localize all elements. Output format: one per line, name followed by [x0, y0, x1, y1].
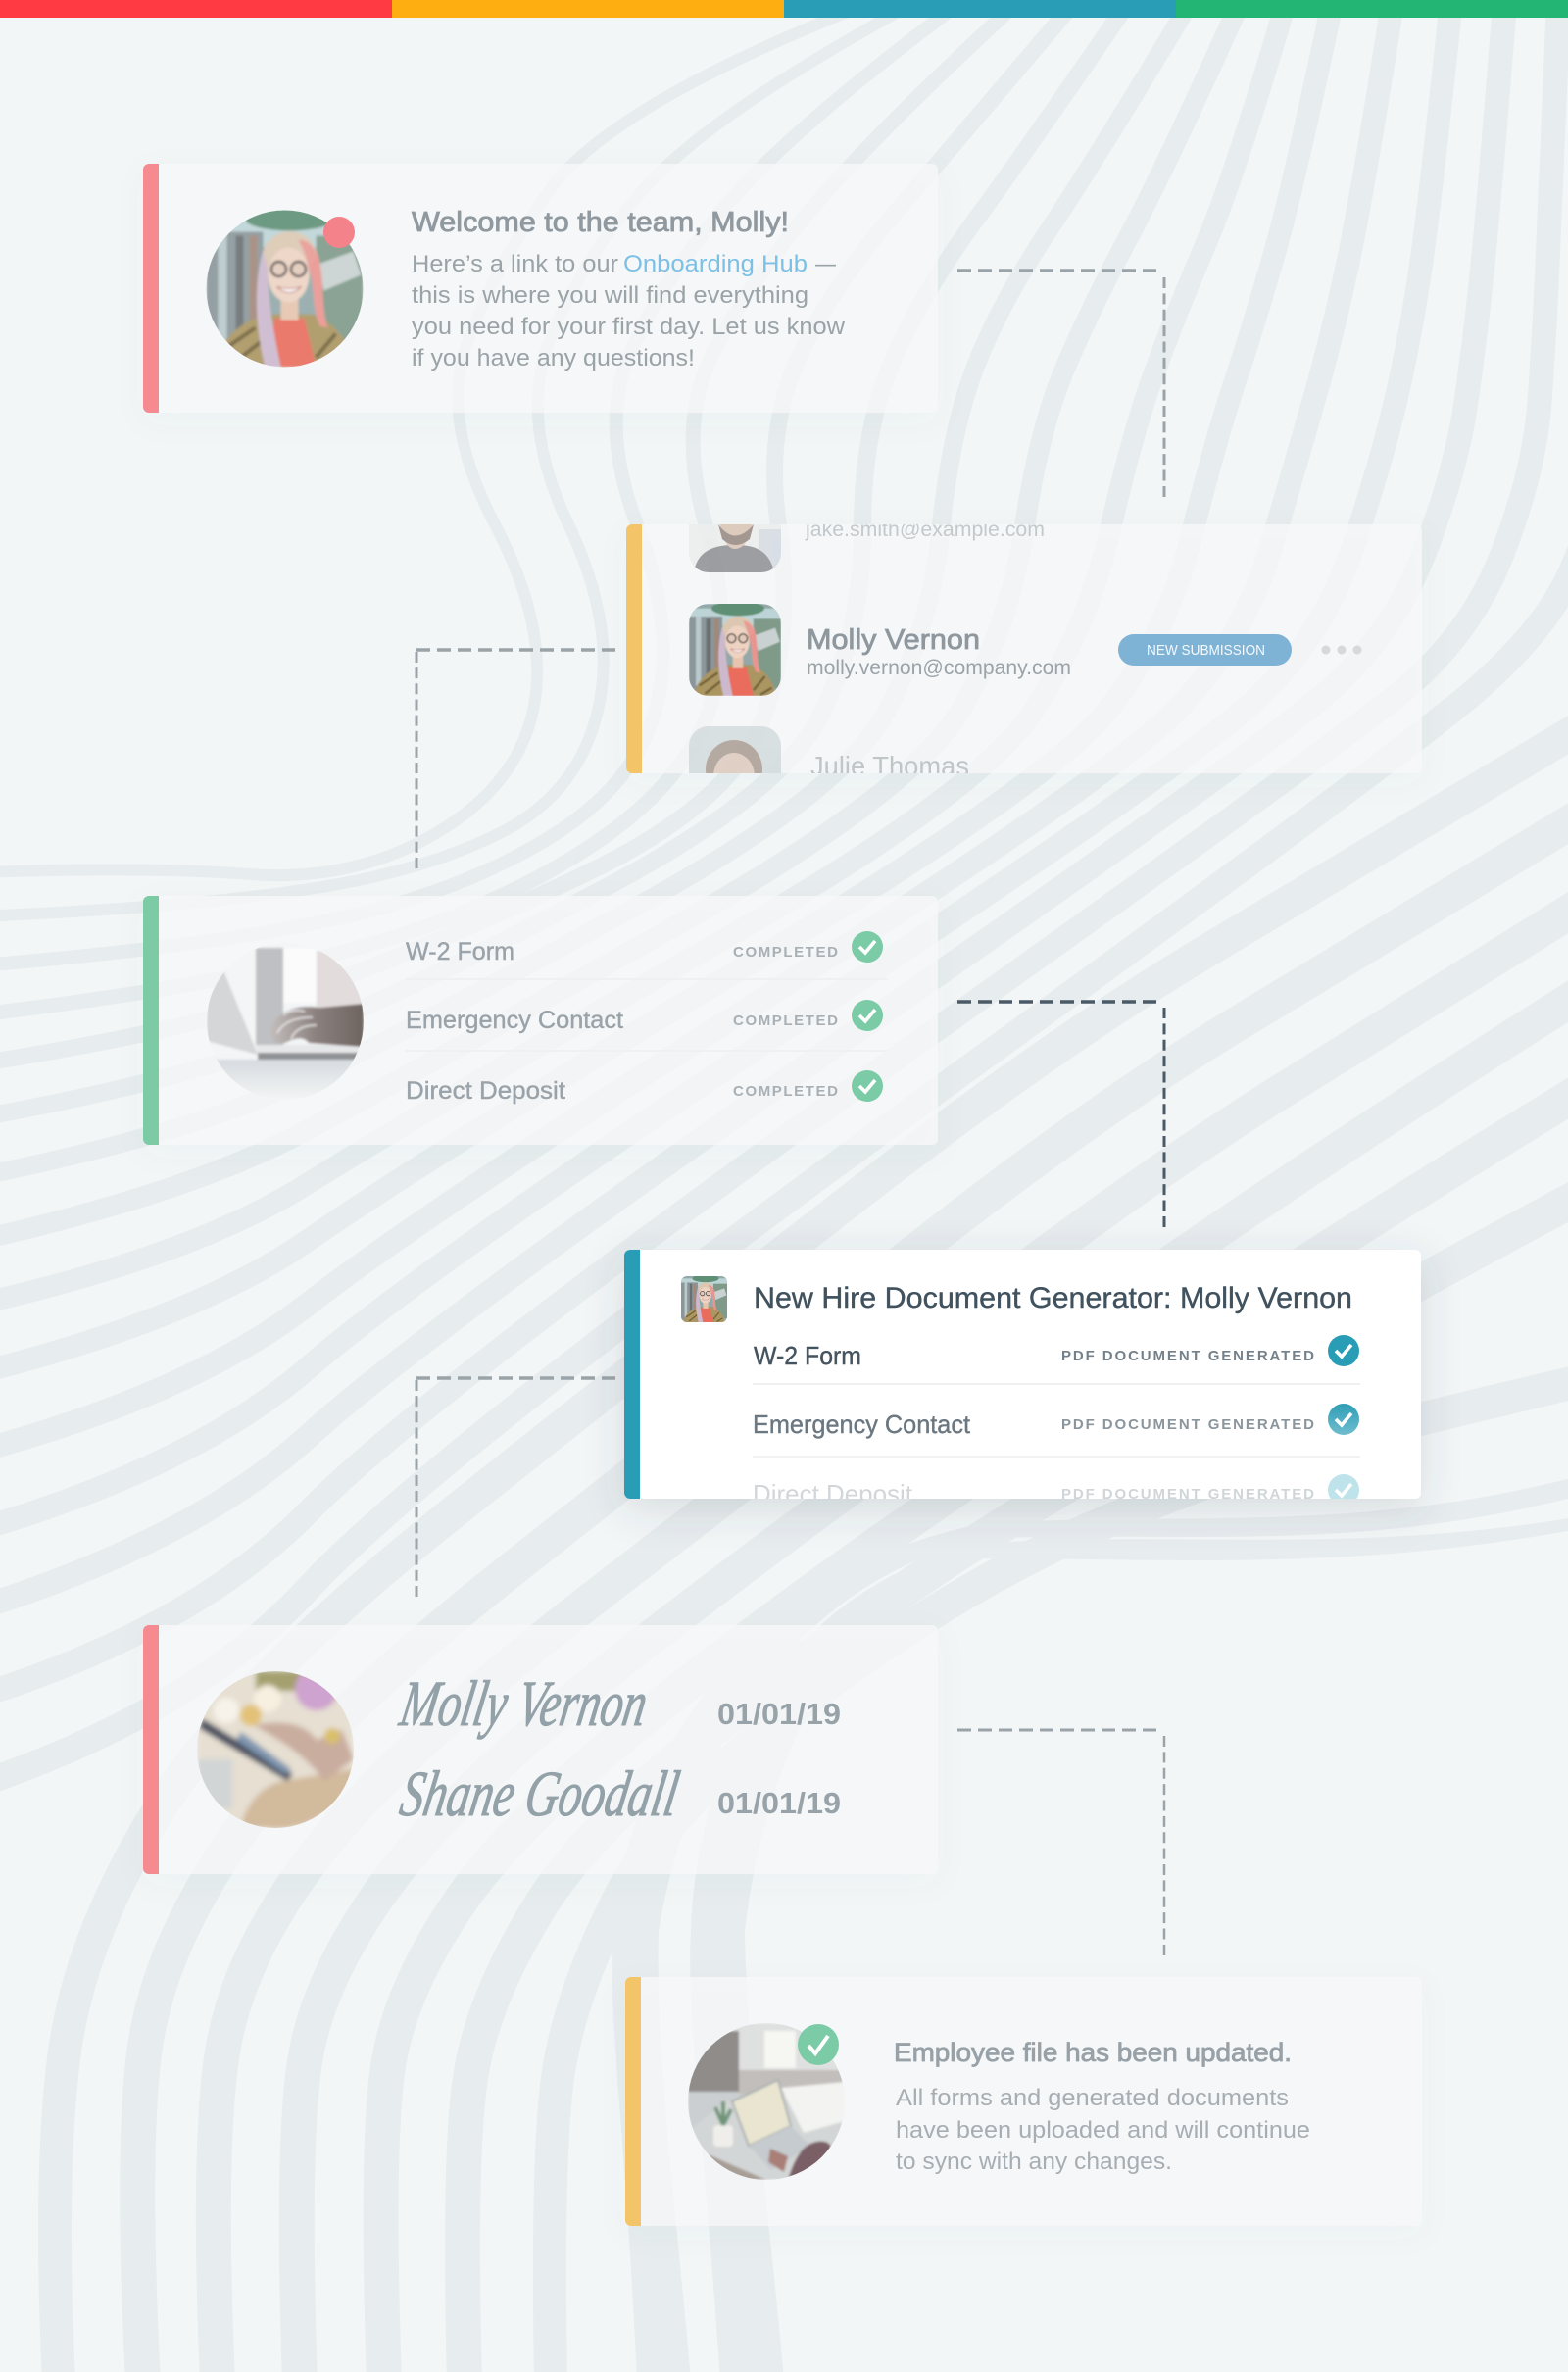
text: Direct Deposit row: [406, 1070, 883, 1105]
text: Molly signature: Molly Vernon: [395, 1668, 653, 1740]
text: W-2 Form row: W-2 Form: [406, 938, 514, 965]
heading: employee file: Employee file has been updated.: [894, 2038, 1292, 2067]
icon: laptop photo: [207, 943, 364, 1100]
arrow: connector forms to generator: [957, 1002, 1164, 1227]
text: Shane signature: Shane Goodall: [395, 1758, 684, 1830]
text: Direct Deposit row: [755, 1474, 1359, 1499]
text: Direct Deposit row: Direct Deposit: [753, 1479, 913, 1508]
panel: completed forms: [143, 896, 938, 1145]
text block: welcome body: [412, 251, 846, 371]
text: Emergency Contact row: COMPLETED: [733, 1013, 838, 1029]
text: W-2 row: W-2 Form: [754, 1341, 861, 1370]
heading: welcome: Welcome to the team, Molly!: [412, 207, 789, 238]
badge: new submission: [1118, 634, 1292, 666]
icon: Molly portrait: [206, 206, 363, 367]
icon: Julie portrait: [689, 726, 781, 773]
icon: more dots: [1321, 645, 1362, 655]
top colour bar: [0, 0, 1568, 18]
text: Direct Deposit row: Direct Deposit: [406, 1077, 565, 1105]
text: Molly date: 01/01/19: [717, 1697, 841, 1731]
text: Emergency Contact row: Emergency Contact: [753, 1409, 971, 1439]
text block: welcome body: Here’s a link to our: [412, 251, 618, 277]
arrow: connector submissions to forms: [415, 650, 615, 868]
text: Molly email: molly.vernon@company.com: [807, 657, 1071, 679]
badge: new submission: NEW SUBMISSION: [1147, 642, 1265, 659]
text: Julie name: Julie Thomas: [810, 751, 969, 781]
arrow: connector welcome to submissions: [957, 271, 1164, 497]
icon: Molly portrait small: [689, 601, 781, 696]
text block: welcome body: this is where you will find everything: [412, 282, 808, 309]
text block: welcome body: if you have any questions!: [412, 345, 695, 371]
text: Emergency Contact row: [406, 1000, 883, 1034]
panel: new submissions list: [626, 524, 1422, 773]
text: W-2 row: [753, 1335, 1359, 1366]
text: W-2 Form row: COMPLETED: [733, 944, 838, 961]
icon: phone photo: [197, 1667, 354, 1829]
text block: employee file body: All forms and generated documents: [896, 2085, 1289, 2111]
panel: signatures: [143, 1625, 938, 1874]
text: W-2 row: PDF DOCUMENT GENERATED: [1061, 1348, 1314, 1364]
text block: employee file body: [896, 2085, 1310, 2175]
panel: employee file updated: [625, 1977, 1309, 2226]
text: Emergency Contact row: PDF DOCUMENT GENERATED: [1061, 1416, 1314, 1433]
panel: new hire document generator: [624, 1250, 1421, 1508]
text: Emergency Contact row: [753, 1404, 1359, 1439]
text: Emergency Contact row: Emergency Contact: [406, 1007, 623, 1034]
arrow: connector signatures to employee file: [957, 1730, 1164, 1955]
text block: employee file body: to sync with any changes.: [896, 2149, 1172, 2175]
heading: generator title: New Hire Document Generator: Molly Vernon: [754, 1282, 1352, 1314]
text: Direct Deposit row: PDF DOCUMENT GENERATED: [1061, 1486, 1314, 1503]
icon: Jake portrait: [689, 524, 781, 572]
panel: welcome message: [143, 164, 938, 413]
text block: welcome body: —: [815, 251, 836, 277]
text: Molly name: Molly Vernon: [807, 624, 980, 656]
arrow: connector generator to signatures: [415, 1378, 615, 1597]
text: Direct Deposit row: COMPLETED: [733, 1083, 838, 1100]
text: Jake email: jake.smith@example.com: [805, 519, 1045, 541]
text block: employee file body: have been uploaded and will continue: [896, 2117, 1310, 2144]
icon: check badge: [798, 2024, 839, 2065]
icon: notification dot: [323, 217, 355, 248]
text block: welcome body: Onboarding Hub: [623, 251, 808, 277]
icon: Molly thumbnail: [681, 1275, 727, 1322]
icon: office photo: [688, 2023, 845, 2180]
text block: welcome body: you need for your first day. Let us know: [412, 314, 846, 340]
text: Shane date: 01/01/19: [717, 1786, 841, 1820]
text: W-2 Form row: [406, 931, 883, 965]
